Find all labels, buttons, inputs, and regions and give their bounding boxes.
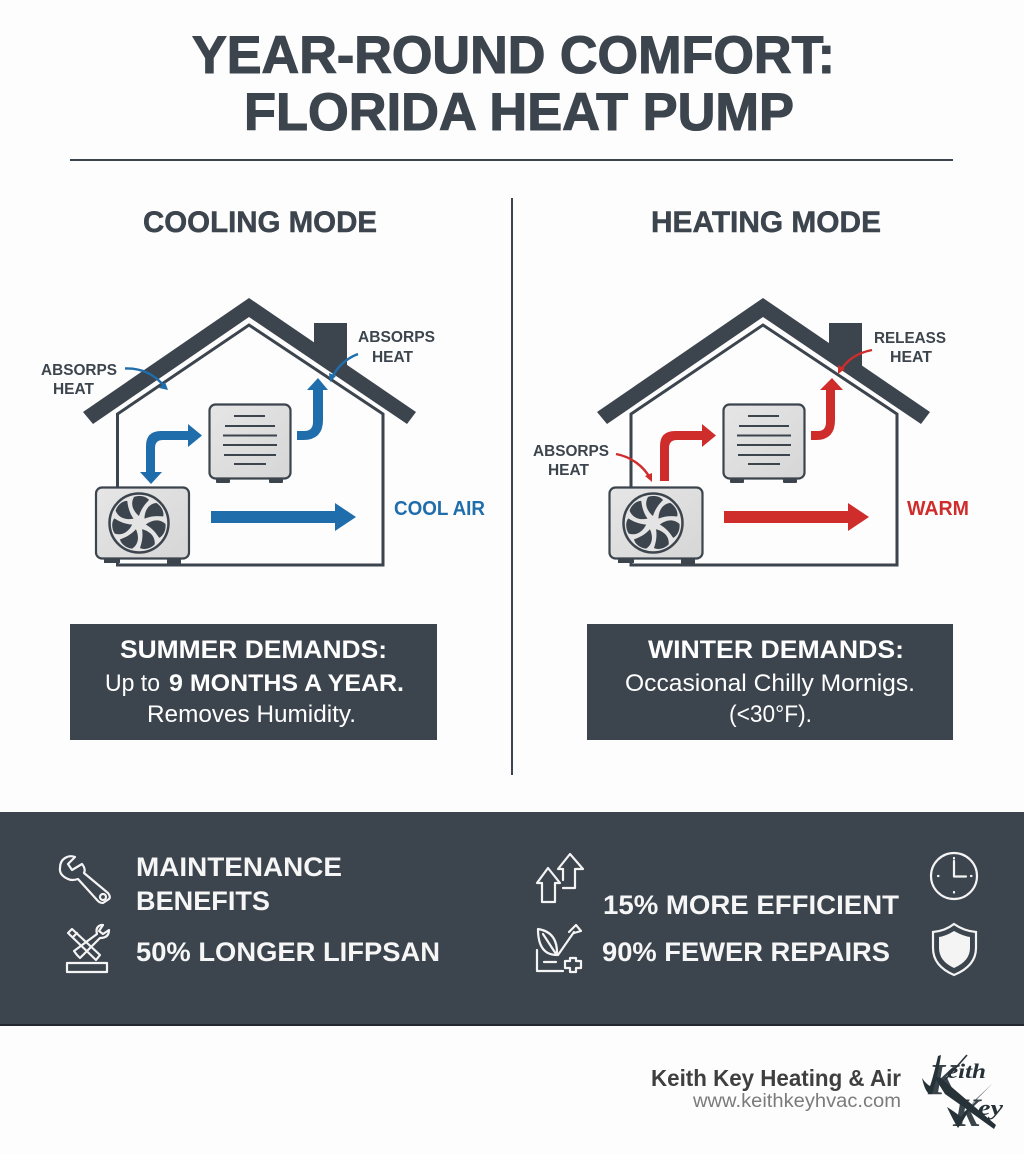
panel: heating mode	[533, 206, 969, 740]
house outline	[597, 298, 930, 565]
heading: maintenance benefits	[136, 852, 342, 916]
label: warm: WARM	[907, 498, 969, 520]
arrow: blue rising to roof	[297, 378, 328, 440]
pointer: left absorbs heat	[125, 368, 168, 390]
logo: Keith Key monogram: ey	[978, 1095, 1003, 1120]
icon: crossed tools	[67, 925, 109, 972]
house outline	[83, 298, 416, 565]
label: right absorbs heat	[358, 329, 435, 366]
icon: wrench	[60, 856, 110, 903]
icon: shield	[933, 924, 976, 975]
label: release heat	[874, 330, 946, 366]
title: FLORIDA HEAT PUMP	[244, 83, 794, 142]
label: left absorbs heat	[41, 362, 117, 398]
indoor unit	[724, 404, 804, 483]
icon: clock	[931, 853, 977, 899]
pointer: release heat	[838, 350, 872, 374]
pointer: outdoor absorbs heat	[616, 454, 652, 482]
arrow: warm air	[724, 503, 869, 531]
indoor unit	[210, 404, 290, 483]
callout: winter demands: WINTER DEMANDS:	[648, 636, 904, 664]
label: cool air: COOL AIR	[394, 498, 486, 520]
logo: Keith Key monogram	[922, 1055, 1003, 1135]
house diagram: heating	[533, 298, 969, 565]
icon: up arrows	[537, 854, 583, 902]
arrow: blue loop to indoor unit	[140, 424, 202, 484]
stat: longer lifespan: 50% LONGER LIFPSAN	[136, 937, 440, 967]
heading: heating mode: HEATING MODE	[651, 206, 881, 239]
outdoor unit with fan	[96, 488, 189, 564]
callout: summer demands: Removes Humidity.	[147, 701, 356, 728]
logo: Keith Key monogram: K	[927, 1055, 960, 1104]
heading: cooling mode: COOLING MODE	[143, 206, 377, 239]
footer: company name and url: www.keithkeyhvac.com	[692, 1091, 901, 1112]
stat: fewer repairs: 90% FEWER REPAIRS	[602, 937, 890, 967]
logo: Keith Key monogram: eith	[947, 1059, 986, 1083]
house diagram: cooling	[41, 298, 486, 565]
callout: summer demands: Up to	[105, 670, 160, 697]
callout: summer demands: SUMMER DEMANDS:	[120, 636, 387, 664]
label: right absorbs heat: ABSORPS	[358, 329, 435, 346]
icon: leaf growth	[537, 925, 581, 972]
label: outdoor absorbs heat: HEAT	[548, 462, 590, 479]
footer: company name and url	[651, 1065, 901, 1112]
label: release heat: RELEASS	[874, 330, 946, 347]
arrow: cool air	[211, 503, 356, 531]
pointer: right absorbs heat	[329, 354, 358, 382]
label: left absorbs heat: HEAT	[53, 381, 95, 398]
label: outdoor absorbs heat	[533, 443, 609, 479]
arrow: red rising to roof	[811, 378, 843, 440]
label: right absorbs heat: HEAT	[372, 349, 414, 366]
outdoor unit with fan	[610, 488, 702, 564]
callout: winter demands	[587, 624, 953, 740]
title: YEAR-ROUND COMFORT:	[192, 26, 835, 85]
callout: summer demands: 9 MONTHS A YEAR.	[169, 670, 404, 697]
stat: more efficient: 15% MORE EFFICIENT	[603, 890, 900, 920]
heading: maintenance benefits: MAINTENANCE	[136, 852, 342, 882]
callout: summer demands	[70, 624, 437, 740]
callout: winter demands: (<30°F).	[729, 701, 812, 728]
logo: Keith Key monogram: K	[952, 1090, 982, 1135]
label: release heat: HEAT	[890, 349, 933, 366]
callout: winter demands: Occasional Chilly Mornigs.	[625, 670, 915, 697]
panel: cooling mode	[41, 206, 486, 740]
title	[192, 26, 835, 142]
footer: company name and url: Keith Key Heating & Air	[651, 1065, 901, 1091]
label: outdoor absorbs heat: ABSORPS	[533, 443, 609, 460]
panel: maintenance benefits band	[0, 812, 1024, 1026]
label: left absorbs heat: ABSORPS	[41, 362, 117, 379]
heading: maintenance benefits: BENEFITS	[136, 886, 270, 916]
arrow: red rising to indoor unit	[660, 424, 716, 481]
